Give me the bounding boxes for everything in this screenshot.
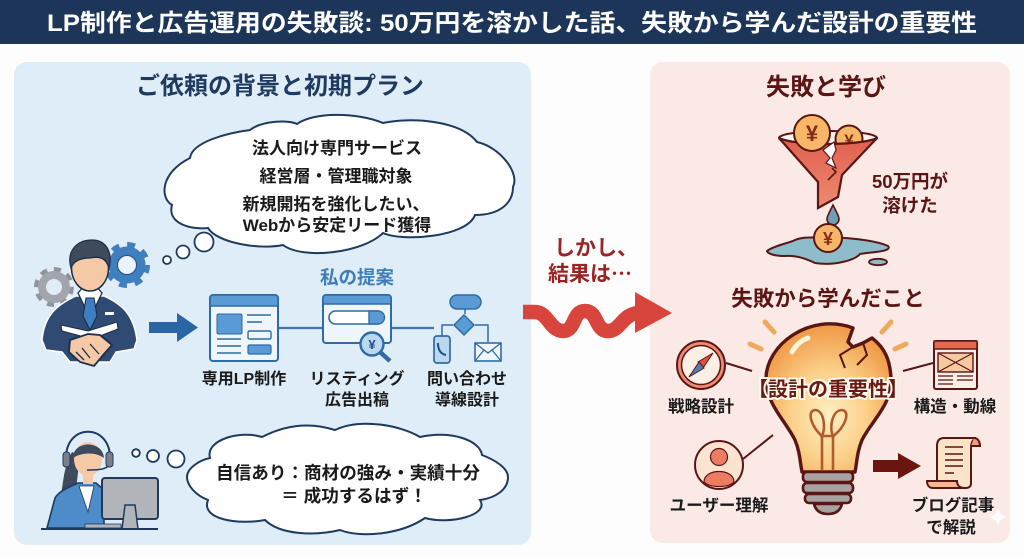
- thought cloud: confidence: ＝ 成功するはず！: [281, 486, 427, 506]
- icon: sparkle: [988, 507, 1008, 527]
- icon: woman at computer: [41, 432, 158, 529]
- panel: failure and lessons: [650, 62, 1010, 543]
- thought cloud: client needs: Webから安定リード獲得: [243, 216, 431, 235]
- label: explained in blog: [912, 495, 994, 537]
- label: explained in blog: で解説: [926, 518, 976, 537]
- icon: inquiry flow: [434, 295, 501, 363]
- thought cloud: client needs: 経営層・管理職対象: [260, 166, 412, 186]
- label: 500k yen melted: 50万円が: [872, 171, 949, 192]
- label: structure and flow: 構造・動線: [914, 397, 997, 416]
- icon: wireframe window: [903, 341, 977, 389]
- label: user understanding: ユーザー理解: [670, 496, 769, 515]
- label: dedicated LP: 専用LP制作: [202, 369, 286, 388]
- label: 500k yen melted: 溶けた: [882, 195, 938, 216]
- callout: but the result: [548, 237, 638, 286]
- callout: but the result: しかし、: [554, 237, 638, 260]
- heading: background: ご依頼の背景と初期プラン: [136, 72, 424, 100]
- label: importance of design: 【設計の重要性】: [748, 378, 908, 401]
- panel: background and initial plan: [14, 62, 531, 545]
- icon: search ad window: ¥: [368, 337, 376, 352]
- icon: puddle with coin: ¥: [823, 229, 833, 249]
- label: inquiry flow: 問い合わせ: [427, 370, 507, 388]
- thought cloud: client needs: [165, 115, 514, 253]
- icon: broken funnel with coins: ¥: [844, 131, 854, 150]
- arrow: to blog: [873, 453, 921, 479]
- title bar: LP制作と広告運用の失敗談: 50万円を溶かした話、失敗から学んだ設計の重要性: [47, 10, 977, 37]
- thought cloud: confidence: [187, 424, 508, 534]
- icon: broken funnel with coins: ¥: [806, 121, 819, 146]
- icon: user: [695, 435, 773, 489]
- icon: gray gear: [36, 270, 72, 304]
- icon: bulb base: [803, 472, 853, 514]
- icon: broken funnel with coins: [779, 115, 877, 225]
- connector lines: [278, 327, 434, 329]
- icon: compass: [677, 341, 752, 389]
- label: strategy design: 戦略設計: [668, 396, 734, 416]
- thought dots: woman: [132, 449, 184, 468]
- title bar: [0, 0, 1024, 44]
- arrow: wavy to failure: [523, 292, 672, 333]
- icon: landing page window: [210, 295, 278, 361]
- arrow: to proposal: [149, 313, 198, 342]
- label: explained in blog: ブログ記事: [912, 495, 994, 515]
- panel: background and initial plan: 広告出稿: [325, 391, 389, 409]
- thought cloud: client needs: 新規開拓を強化したい、: [242, 195, 430, 214]
- heading: my proposal: 私の提案: [320, 267, 394, 288]
- callout: but the result: 結果は⋯: [548, 263, 632, 286]
- label: listing ads: リスティング: [309, 369, 405, 388]
- icon: puddle with coin: [767, 224, 889, 265]
- heading: failure and lessons: 失敗と学び: [766, 74, 886, 101]
- label: 500k yen melted: [872, 171, 949, 216]
- thought cloud: client needs: 法人向け専門サービス: [252, 138, 422, 158]
- icon: search ad window: [323, 295, 391, 361]
- icon: businessman with gears: [36, 240, 148, 366]
- icon: blue gear: [106, 244, 148, 286]
- heading: what I learned: 失敗から学んだこと: [731, 287, 925, 311]
- icon: cracked light bulb: [750, 322, 906, 514]
- panel: background and initial plan: 導線設計: [435, 390, 499, 409]
- thought dots: client: [163, 232, 214, 264]
- icon: scroll document: [927, 438, 980, 488]
- thought cloud: confidence: 自信あり：商材の強み・実績十分: [216, 463, 480, 483]
